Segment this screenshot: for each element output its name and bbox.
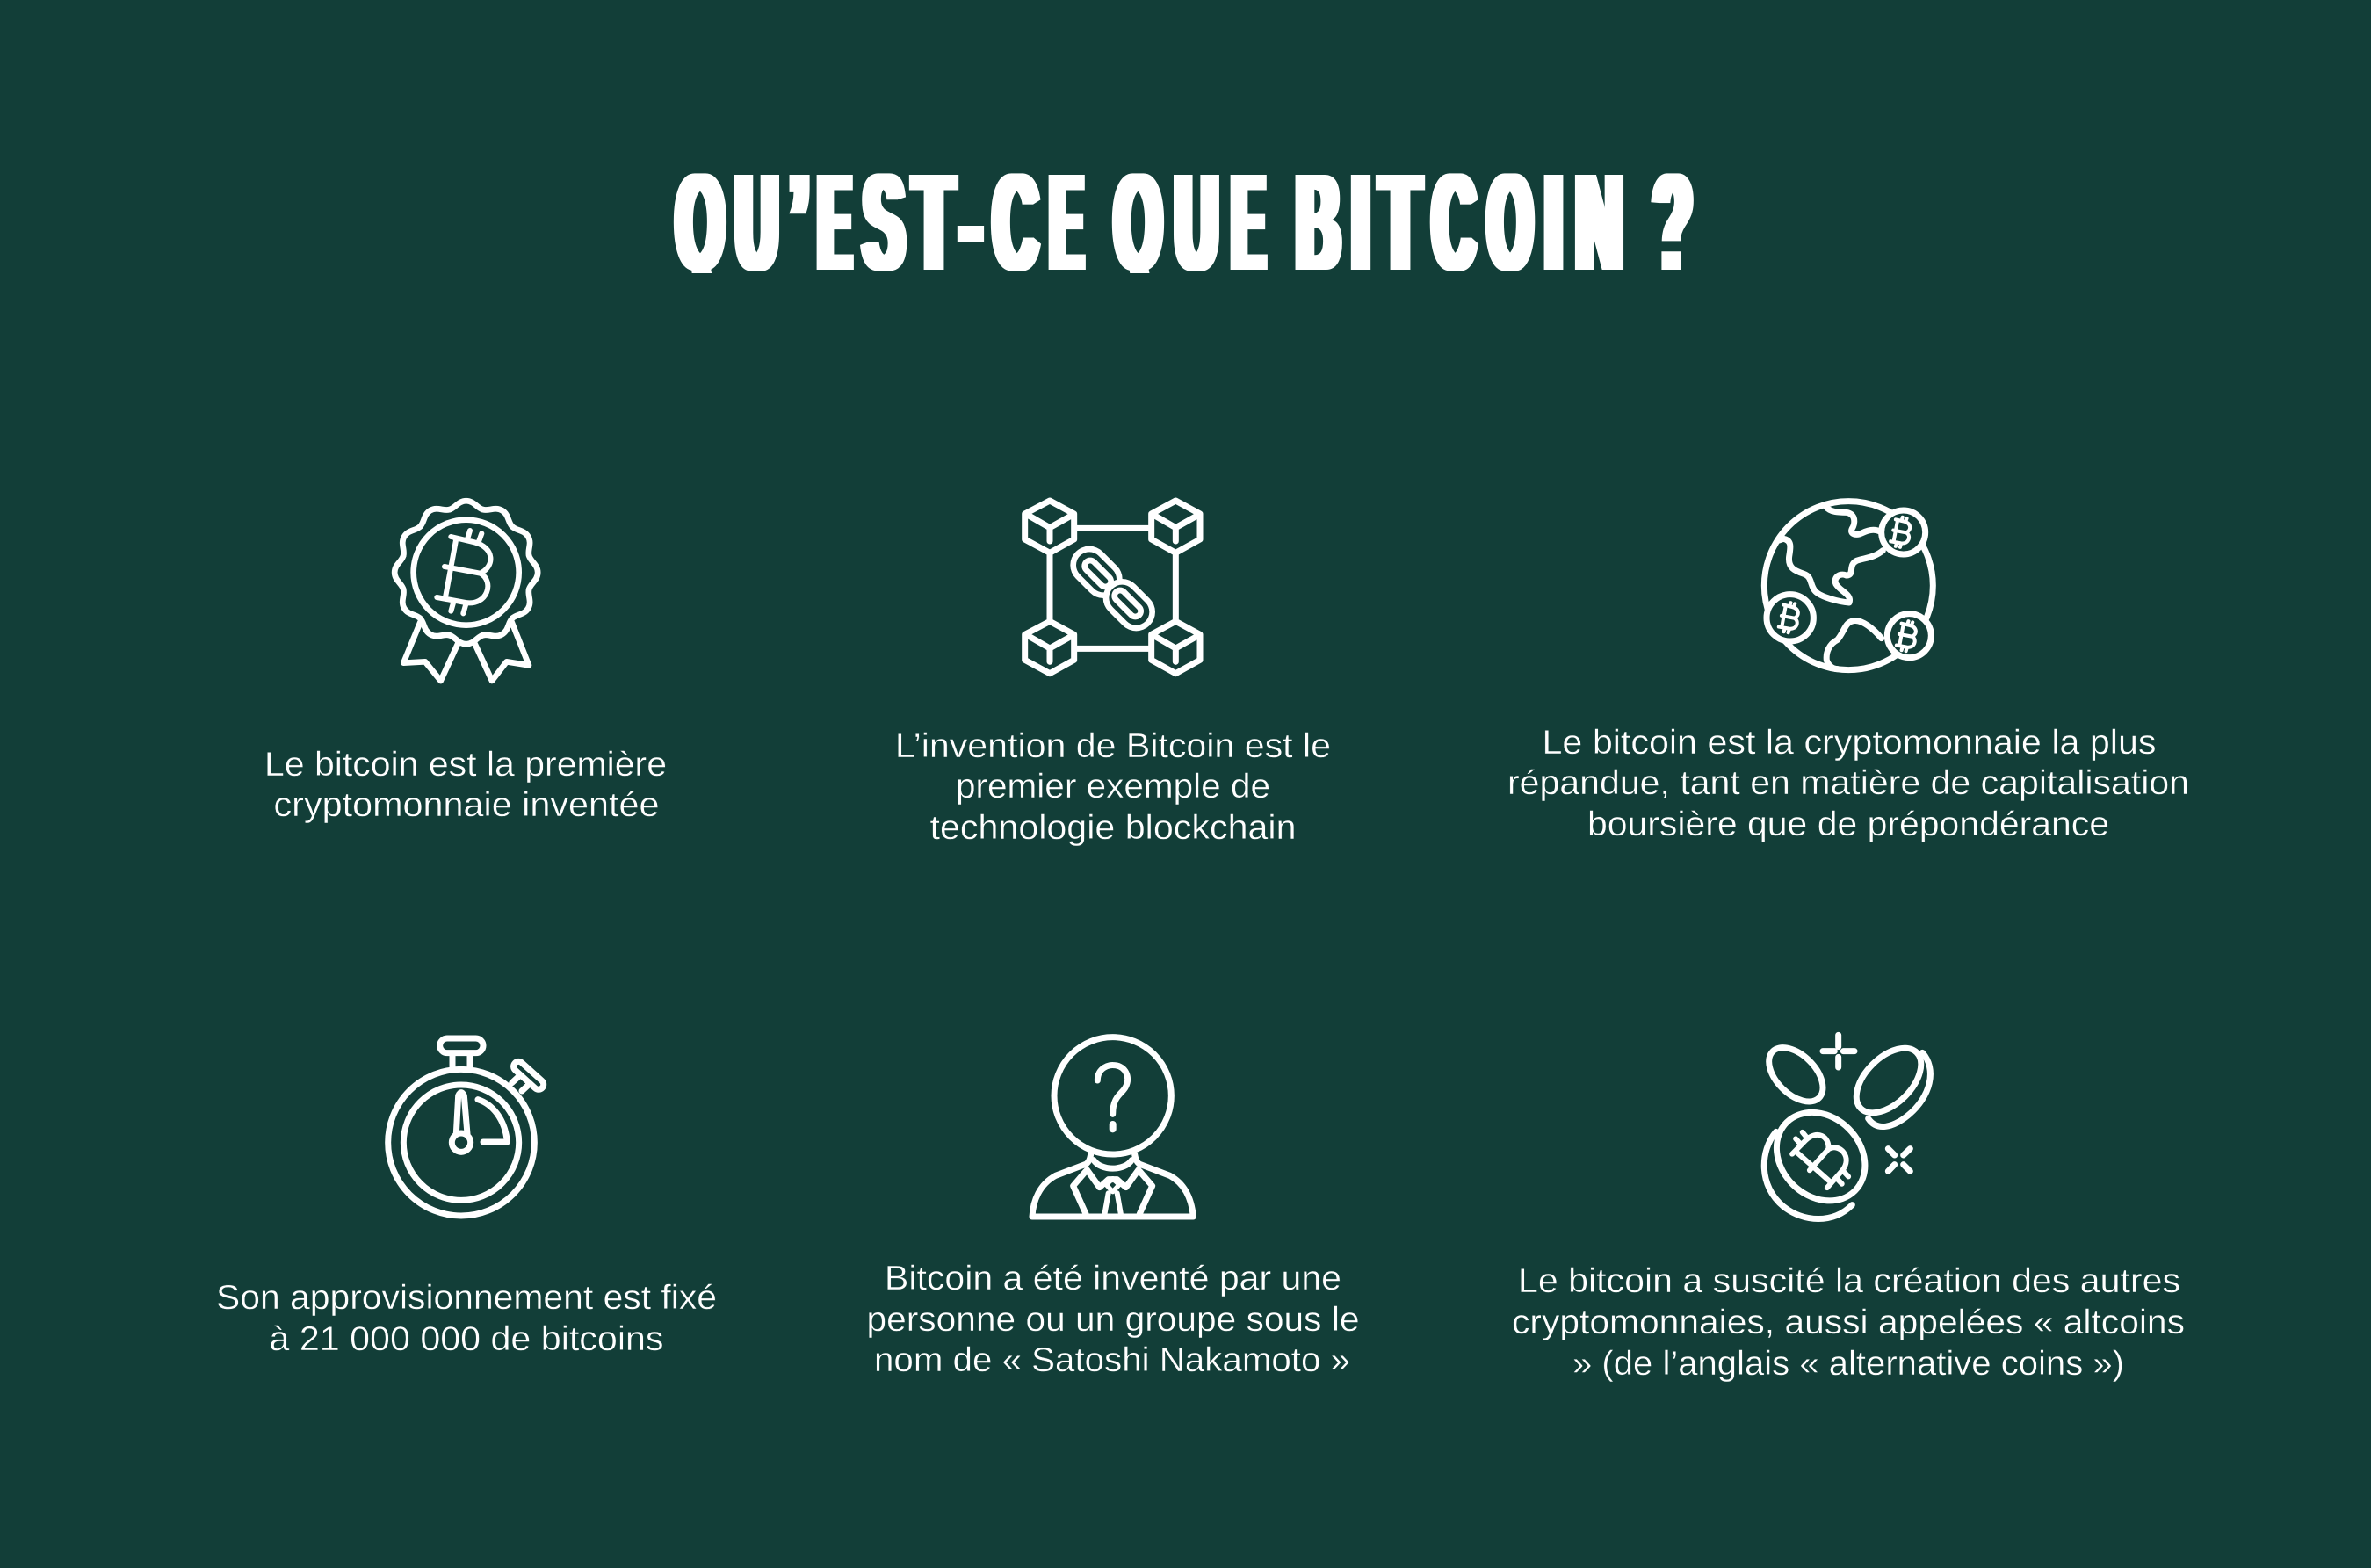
text: Satoshi Nakamoto	[866, 1260, 1360, 1379]
text: Satoshi Nakamoto: nom de « Satoshi Nakamoto »	[874, 1341, 1350, 1379]
text: fixed supply: Son approvisionnement est fixé	[216, 1279, 717, 1317]
title: S	[864, 146, 904, 300]
panel: Satoshi Nakamoto	[866, 1037, 1360, 1379]
title: E	[1051, 146, 1082, 300]
panel: first cryptocurrency	[264, 501, 667, 824]
icon: bitcoin award badge	[394, 501, 538, 681]
text: blockchain technology	[895, 727, 1331, 847]
text: blockchain technology: premier exemple de	[956, 768, 1270, 806]
text: altcoins: Le bitcoin a suscité la création des autres	[1518, 1262, 2180, 1300]
icon: anonymous person	[1032, 1037, 1193, 1217]
title: T	[914, 146, 954, 300]
text: first cryptocurrency: cryptomonnaie inventée	[274, 786, 659, 824]
icon: globe with bitcoins	[1764, 502, 1933, 670]
text: fixed supply: à 21 000 000 de bitcoins	[269, 1320, 664, 1358]
title: E	[819, 146, 850, 300]
text: blockchain technology: technologie blockchain	[929, 809, 1297, 847]
text: altcoins: » (de l’anglais « alternative coins »)	[1572, 1345, 2124, 1383]
panel: altcoins	[1512, 1035, 2185, 1383]
title: O	[1488, 146, 1532, 300]
title: I	[1352, 146, 1370, 300]
text: ?	[1653, 146, 1692, 300]
text: most widespread	[1507, 724, 2189, 843]
text: most widespread: boursière que de prépondérance	[1587, 806, 2109, 843]
title: C	[994, 146, 1037, 300]
title: N	[1576, 146, 1623, 300]
icon: blockchain cubes and chain	[1025, 501, 1200, 674]
title: C	[1433, 146, 1475, 300]
title: T	[1380, 146, 1420, 300]
title: Q	[1115, 146, 1161, 300]
text: first cryptocurrency	[264, 746, 667, 824]
title: ’	[790, 146, 809, 300]
icon: stopwatch	[388, 1038, 546, 1216]
title: U	[1175, 146, 1218, 300]
text: most widespread: Le bitcoin est la cryptomonnaie la plus	[1543, 724, 2156, 762]
title: -	[960, 146, 981, 300]
text: Satoshi Nakamoto: personne ou un groupe sous le	[866, 1301, 1360, 1339]
text: fixed supply	[216, 1279, 717, 1358]
title: Q	[676, 146, 724, 300]
panel: most widespread	[1507, 502, 2189, 843]
text: blockchain technology: L’invention de Bitcoin est le	[895, 727, 1331, 765]
text: altcoins	[1512, 1262, 2185, 1383]
text: Satoshi Nakamoto: Bitcoin a été inventé par une	[885, 1260, 1341, 1297]
panel: blockchain technology	[895, 501, 1331, 847]
icon: coins and sparkles	[1759, 1035, 1933, 1218]
title: I	[1545, 146, 1562, 300]
title: E	[1232, 146, 1264, 300]
text: most widespread: répandue, tant en matière de capitalisation	[1507, 764, 2189, 802]
title: B	[1297, 146, 1340, 300]
panel: fixed supply	[216, 1038, 717, 1358]
text: first cryptocurrency: Le bitcoin est la première	[264, 746, 667, 784]
title	[673, 173, 1694, 273]
title: U	[736, 146, 777, 300]
text: altcoins: cryptomonnaies, aussi appelées « altcoins	[1512, 1304, 2185, 1341]
